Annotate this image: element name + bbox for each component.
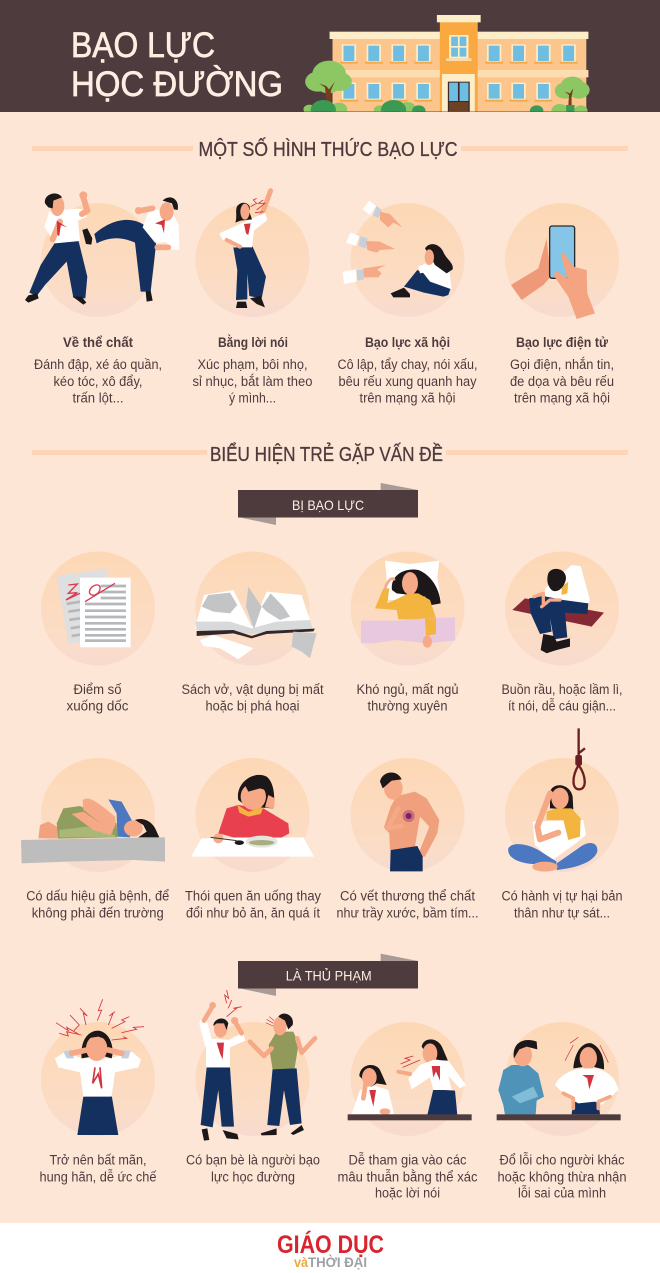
caption: sadness xyxy=(502,682,622,714)
caption: faking illness xyxy=(26,889,169,920)
ribbon: victim xyxy=(238,483,418,525)
caption: conflicts: Dễ tham gia vào các xyxy=(348,1153,467,1168)
description: electronic: đe dọa và bêu rếu xyxy=(510,374,614,389)
caption: violent friends xyxy=(186,1153,320,1184)
illustration: school building xyxy=(303,15,590,120)
caption: damaged books xyxy=(182,682,324,714)
description: physical: trấn lột... xyxy=(72,390,124,406)
caption: faking illness: không phải đến trường xyxy=(32,905,164,920)
description: verbal xyxy=(192,357,312,406)
title xyxy=(71,26,283,104)
description: physical: kéo tóc, xô đẩy, xyxy=(54,374,142,389)
item: faking illness xyxy=(21,758,169,920)
item: violent friends xyxy=(186,990,320,1184)
section heading: signs xyxy=(32,443,628,466)
description: physical: Đánh đập, xé áo quần, xyxy=(34,357,162,372)
item: self harm xyxy=(502,728,622,920)
header band xyxy=(0,0,660,120)
caption: falling grades: Điểm số xyxy=(74,682,122,697)
item: blaming others xyxy=(497,1022,626,1200)
caption: faking illness: Có dấu hiệu giả bệnh, để xyxy=(26,889,169,904)
description: verbal: sỉ nhục, bắt làm theo xyxy=(192,374,312,389)
illustration: scolding at table xyxy=(348,1039,472,1120)
description: social: Cô lập, tẩy chay, nói xấu, xyxy=(338,357,478,372)
caption: eating changes: Thói quen ăn uống thay xyxy=(185,889,321,904)
heading: social: Bạo lực xã hội xyxy=(365,335,450,350)
title: HỌC ĐƯỜNG xyxy=(71,65,283,104)
illustration: exam papers xyxy=(57,568,131,647)
ribbon: perpetrator xyxy=(238,954,418,996)
illustration: girl not eating xyxy=(191,775,314,857)
caption: conflicts xyxy=(338,1153,478,1200)
illustration: hands with phone xyxy=(511,225,595,319)
illustration: angry girl holding head xyxy=(55,999,144,1135)
illustration: shouting girl xyxy=(219,191,271,308)
description: social: bêu rếu xung quanh hay xyxy=(338,374,477,389)
item: insomnia xyxy=(350,552,464,714)
caption: conflicts: mâu thuẫn bằng thể xác xyxy=(338,1169,478,1184)
description: verbal: ý mình... xyxy=(229,390,276,406)
caption: sadness: ít nói, dễ cáu giận... xyxy=(508,698,616,714)
caption: eating changes: đổi như bỏ ăn, ăn quá ít xyxy=(186,905,320,920)
caption: violent friends: lực học đường xyxy=(211,1169,295,1184)
illustration: torn book xyxy=(195,587,317,659)
caption: blaming others: hoặc không thừa nhận xyxy=(498,1169,626,1184)
caption: damaged books: Sách vở, vật dụng bị mất xyxy=(182,682,324,697)
heading: physical: Về thể chất xyxy=(63,335,133,350)
title: BẠO LỰC xyxy=(71,26,215,65)
illustration: two boys fighting xyxy=(25,191,179,305)
caption: self harm xyxy=(502,889,622,920)
section heading: forms xyxy=(32,137,628,161)
caption: eating changes xyxy=(185,889,321,920)
description: social xyxy=(338,357,478,406)
illustration: pointing hands and girl xyxy=(343,201,453,297)
description: electronic: trên mạng xã hội xyxy=(514,390,610,406)
caption: self harm: Có hành vị tự hại bản xyxy=(502,889,622,904)
caption: insomnia: thường xuyên xyxy=(368,698,448,714)
section heading: forms: MỘT SỐ HÌNH THỨC BẠO LỰC xyxy=(198,137,458,161)
caption: insomnia: Khó ngủ, mất ngủ xyxy=(356,682,458,697)
illustration: depressed youth on mat xyxy=(512,565,604,653)
description: social: trên mạng xã hội xyxy=(360,390,456,406)
item: social xyxy=(338,201,478,406)
illustration: arms crossed students xyxy=(497,1037,621,1120)
caption: frustration xyxy=(40,1153,157,1184)
illustration: injured torso xyxy=(380,772,439,871)
panel: forms of violence xyxy=(25,137,628,406)
panel: warning signs xyxy=(21,443,628,1200)
item: physical xyxy=(25,191,179,406)
description: verbal: Xúc phạm, bôi nhọ, xyxy=(198,357,308,372)
description: physical xyxy=(34,357,162,406)
item: frustration xyxy=(40,999,157,1184)
caption: damaged books: hoặc bị phá hoại xyxy=(206,698,300,714)
item: falling grades xyxy=(41,552,155,714)
logo: Giáo dục và Thời đại: GIÁO DỤC xyxy=(277,1230,384,1259)
caption: sadness: Buồn rầu, hoặc lầm lì, xyxy=(502,682,622,697)
caption: falling grades xyxy=(66,682,129,714)
item: verbal xyxy=(192,191,312,406)
caption: violent friends: Có bạn bè là người bạo xyxy=(186,1153,320,1168)
item: physical wounds xyxy=(336,758,478,920)
caption: insomnia xyxy=(356,682,458,714)
description: electronic: Gọi điện, nhắn tin, xyxy=(510,357,614,372)
illustration: girl awake in bed xyxy=(361,561,455,648)
caption: physical wounds xyxy=(336,889,478,920)
caption: self harm: thân như tự sát... xyxy=(514,905,610,920)
logo: Giáo dục và Thời đại: và xyxy=(294,1254,308,1270)
heading: electronic: Bạo lực điện tử xyxy=(516,335,608,350)
caption: frustration: Trở nên bất mãn, xyxy=(50,1153,146,1168)
caption: falling grades: xuống dốc xyxy=(66,698,129,714)
item: eating changes xyxy=(185,758,321,920)
caption: blaming others: Đổ lỗi cho người khác xyxy=(500,1153,625,1168)
illustration: two arguing boys xyxy=(201,990,315,1141)
item: sadness xyxy=(502,552,622,714)
item: conflicts xyxy=(338,1022,478,1200)
caption: physical wounds: Có vết thương thể chất xyxy=(340,889,475,904)
heading: verbal: Bằng lời nói xyxy=(218,335,288,350)
logo: Giáo dục và Thời đại xyxy=(277,1230,384,1270)
description: electronic xyxy=(510,357,614,406)
section heading: signs: BIỂU HIỆN TRẺ GẶP VẤN ĐỀ xyxy=(210,443,443,466)
ribbon: perpetrator: LÀ THỦ PHẠM xyxy=(286,967,372,984)
caption: blaming others xyxy=(498,1153,626,1200)
caption: physical wounds: như trầy xước, bầm tím... xyxy=(336,905,478,920)
item: damaged books xyxy=(182,552,324,714)
caption: blaming others: lỗi sai của mình xyxy=(518,1186,606,1200)
ribbon: victim: BỊ BẠO LỰC xyxy=(292,497,364,513)
logo: Giáo dục và Thời đại: THỜI ĐẠI xyxy=(308,1253,367,1270)
caption: frustration: hung hãn, dễ ức chế xyxy=(40,1169,157,1184)
footer with logo xyxy=(0,1223,660,1273)
illustration: noose and girl with pillow xyxy=(508,728,597,872)
caption: conflicts: hoặc lời nói xyxy=(375,1186,440,1200)
item: electronic xyxy=(505,203,619,406)
illustration: child lying on bed xyxy=(21,799,165,863)
